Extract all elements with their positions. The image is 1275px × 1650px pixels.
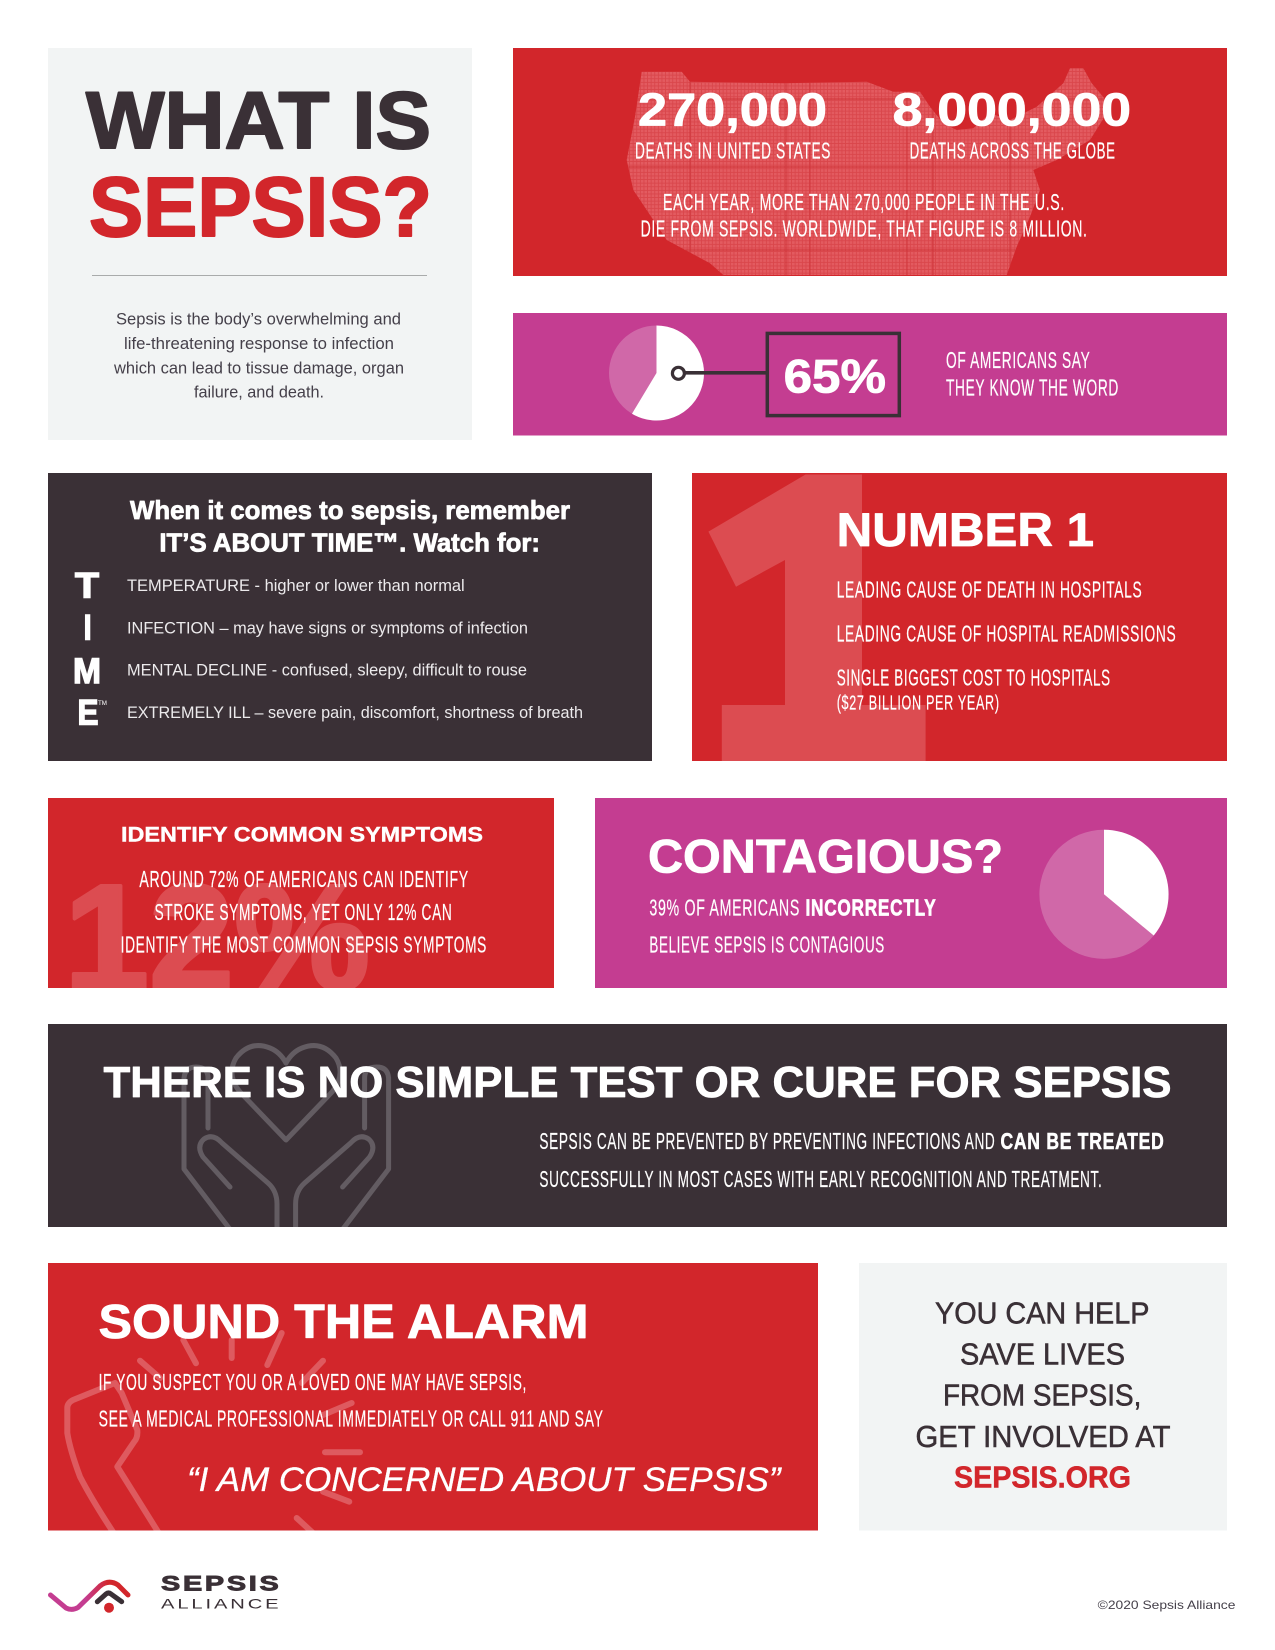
copyright: ©2020 Sepsis Alliance: [1098, 1598, 1236, 1612]
list: warning signs: MENTAL DECLINE - confused, sleepy, difficult to rouse: [127, 660, 527, 680]
text: what to do: IF YOU SUSPECT YOU OR A LOVED ONE MAY HAVE SEPSIS,: [99, 1369, 527, 1395]
pie chart: 39 percent: [1039, 830, 1169, 959]
heading: number 1: NUMBER 1: [837, 504, 1094, 557]
call to action text: GET INVOLVED AT: [916, 1420, 1170, 1454]
heading: it's about time: [130, 495, 570, 558]
stat: 8,000,000: 8,000,000: [893, 84, 1131, 136]
text: symptom recognition: AROUND 72% OF AMERICANS CAN IDENTIFY: [139, 866, 469, 892]
acronym: T I M E: M: [73, 652, 101, 691]
title: sepsis: SEPSIS?: [89, 160, 432, 254]
panel: sound the alarm: [48, 1263, 818, 1535]
panel: what is sepsis: [48, 48, 472, 440]
text: 39 percent believe: INCORRECTLY: [806, 895, 936, 921]
acronym: T I M E: I: [84, 609, 92, 648]
label: deaths across the globe: DEATHS ACROSS THE GLOBE: [910, 138, 1116, 164]
panel: you can help: [859, 1263, 1227, 1530]
definition text: which can lead to tissue damage, organ: [113, 358, 404, 377]
text: 39 percent believe: BELIEVE SEPSIS IS CONTAGIOUS: [649, 931, 885, 957]
definition text: Sepsis is the body’s overwhelming and: [116, 309, 401, 328]
text: symptom recognition: [121, 866, 487, 957]
text: what to do: SEE A MEDICAL PROFESSIONAL IMMEDIATELY OR CALL 911 AND SAY: [99, 1405, 604, 1431]
icon: logo mark: [50, 1582, 128, 1613]
heading: it's about time: When it comes to sepsis, remember: [130, 495, 570, 525]
background numeral: 12%: 12%: [64, 853, 370, 1021]
callout: 65 percent: [767, 333, 899, 416]
definition text: failure, and death.: [194, 383, 324, 402]
logo: sepsis alliance: [50, 1572, 282, 1613]
wordmark: sepsis: SEPSIS: [161, 1572, 282, 1596]
pie chart: 65 percent: [609, 326, 704, 420]
label: deaths in united states: DEATHS IN UNITED STATES: [635, 138, 831, 164]
acronym: T I M E: T: [75, 567, 99, 606]
panel: deaths statistics: [513, 48, 1227, 276]
list: warning signs: EXTREMELY ILL – severe pain, discomfort, shortness of breath: [127, 703, 583, 722]
call to action text: FROM SEPSIS,: [943, 1378, 1141, 1412]
text: symptom recognition: STROKE SYMPTOMS, YET ONLY 12% CAN: [154, 899, 452, 925]
heading: it's about time: IT’S ABOUT TIME™. Watch for:: [159, 528, 540, 558]
panel: it's about time: [48, 473, 652, 761]
text: symptom recognition: IDENTIFY THE MOST COMMON SEPSIS SYMPTOMS: [121, 931, 487, 957]
list: warning signs: [127, 576, 583, 722]
map: united states: [620, 60, 1120, 276]
definition text: life-threatening response to infection: [124, 334, 394, 353]
link: sepsis.org: SEPSIS.ORG: [954, 1461, 1131, 1495]
acronym: T I M E: E: [78, 694, 98, 732]
text: prevention and treatment: CAN BE TREATED: [1000, 1128, 1164, 1154]
text: what to do: [99, 1369, 604, 1431]
panel: identify common symptoms: [48, 798, 554, 988]
heading: identify common symptoms: IDENTIFY COMMON SYMPTOMS: [121, 822, 483, 846]
text: 39 percent believe: 39% OF AMERICANS: [649, 895, 800, 921]
title: what is: WHAT IS: [86, 76, 431, 166]
list: hospital facts: [837, 577, 1176, 715]
icon: hands holding heart: [184, 1046, 389, 1232]
text: americans say they know the word: OF AMERICANS SAY: [946, 347, 1090, 373]
acronym: T I M E: [73, 567, 107, 732]
text: americans say they know the word: [946, 347, 1119, 401]
background numeral: 1: [708, 474, 926, 761]
call to action text: SAVE LIVES: [960, 1337, 1125, 1371]
list: warning signs: TEMPERATURE - higher or lower than normal: [127, 576, 465, 595]
definition text: [113, 309, 404, 402]
list: warning signs: INFECTION – may have signs or symptoms of infection: [127, 618, 528, 637]
call to action text: [916, 1296, 1170, 1454]
connector: pie to callout: [672, 367, 766, 379]
call to action text: YOU CAN HELP: [935, 1296, 1150, 1330]
heading: contagious: CONTAGIOUS?: [648, 830, 1003, 884]
text: americans say they know the word: THEY KNOW THE WORD: [946, 375, 1119, 401]
text: prevention and treatment: [539, 1128, 1164, 1192]
heading: no simple test or cure: THERE IS NO SIMPLE TEST OR CURE FOR SEPSIS: [104, 1059, 1172, 1107]
acronym: T I M E: TM: [98, 700, 107, 707]
heading: sound the alarm: SOUND THE ALARM: [98, 1296, 588, 1349]
panel: number 1: [692, 473, 1227, 761]
text: yearly figures: [641, 189, 1088, 242]
icon: ringing phone: [67, 1333, 360, 1535]
quote: i am concerned about sepsis: “I AM CONCERNED ABOUT SEPSIS”: [187, 1461, 782, 1499]
callout: 65 percent: 65%: [784, 350, 886, 403]
list: hospital facts: ($27 BILLION PER YEAR): [837, 692, 1000, 715]
wordmark: alliance: ALLIANCE: [161, 1596, 282, 1612]
stat: 270,000: 270,000: [638, 84, 827, 136]
panel: contagious: [595, 798, 1227, 988]
panel: no simple test or cure: [48, 1024, 1227, 1232]
panel: 65 percent know the word: [513, 313, 1227, 436]
text: 39 percent believe: [649, 895, 936, 957]
